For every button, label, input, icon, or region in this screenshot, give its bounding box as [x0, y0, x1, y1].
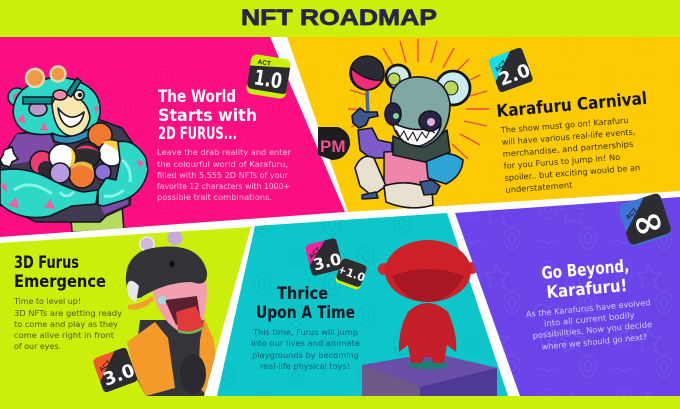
text: act 2 description: The show must go on! Karafuru: [499, 115, 629, 135]
character: 3D whale furu: [126, 231, 216, 396]
badge: act 2.0: ACT: [494, 59, 508, 74]
text: act 1 description: filled with 5,555 2D NFTs of your: [157, 170, 289, 180]
badge: act 3.0 + 1.0: +1.0: [335, 263, 367, 285]
heading: thrice upon a time: [256, 284, 355, 323]
badge: act 3.0 + 1.0: ACT: [308, 246, 322, 261]
text: act 2 description: will have various real-life events,: [501, 126, 636, 147]
heading: thrice upon a time: Thrice: [277, 284, 328, 304]
text: act 3 description: 3D NFTs are getting ready: [14, 308, 122, 318]
badge: act 3.0: [92, 347, 138, 393]
text: infinity description: As the Karafurus have evolved: [525, 297, 651, 319]
text: act 3+1 description: This time, Furus will jump: [252, 327, 358, 337]
text: act 2 description: [499, 114, 641, 195]
text: act 3+1 description: real-life physical toys!: [260, 361, 350, 371]
badge: act 2.0: 2.0: [496, 60, 533, 91]
heading: 3d furus emergence: [14, 253, 106, 292]
character: red toy on purple plinth: [362, 240, 497, 396]
badge: act 3.0: ACT: [98, 359, 113, 374]
text: infinity description: [525, 297, 654, 353]
heading: go beyond karafuru: Karafuru!: [546, 276, 628, 303]
panel: act 3.0 lime: [0, 227, 251, 396]
text: act 3 description: of our eyes.: [14, 341, 61, 351]
top title bar: [0, 0, 680, 37]
bottom bar: [0, 396, 680, 409]
text: act 2 description: merchandise, and partnerships: [502, 139, 634, 159]
speech bomb: PM: [320, 137, 346, 156]
panel: act 2.0 yellow: [287, 37, 680, 212]
badge: act 1.0: [246, 54, 291, 99]
badge: act 3.0: 3.0: [101, 360, 138, 391]
text: act 2 description: understatement: [505, 180, 573, 195]
speech bomb: [318, 127, 350, 160]
heading: 3d furus emergence: Emergence: [14, 272, 106, 292]
sun rays: [348, 39, 489, 159]
title: NFT ROADMAP: [241, 5, 437, 30]
badge: act 2.0: [487, 47, 534, 93]
heading: karafuru carnival: Karafuru Carnival: [496, 89, 648, 122]
character: robot bear: [350, 56, 470, 208]
text: act 1 description: favorite 12 characters with 1000+: [157, 181, 290, 191]
badge: act 1.0: ACT: [257, 59, 271, 68]
badge: act 1.0: 1.0: [252, 65, 284, 94]
badge: infinity: ACT: [625, 207, 639, 221]
text: act 3+1 description: into our lives and animate: [251, 338, 360, 348]
heading: go beyond karafuru: Go Beyond,: [541, 256, 630, 284]
heading: the world starts: The World: [158, 87, 236, 107]
text: act 3+1 description: playgrounds by becoming: [252, 350, 359, 360]
badge: act 3.0 + 1.0: 3.0: [311, 249, 343, 274]
panel: infinity purple: [455, 192, 680, 396]
heading: the world starts: 2D FURUS...: [158, 124, 237, 144]
text: act 2 description: for you Furus to jump in! No: [503, 152, 621, 171]
text: act 1 description: possible trait combinations.: [157, 192, 272, 202]
text: act 3 description: to come and play as they: [14, 319, 118, 329]
text: act 1 description: [157, 147, 292, 202]
heading: thrice upon a time: Upon A Time: [256, 303, 355, 323]
text: infinity description: where we should go next?: [541, 332, 648, 352]
text: act 1 description: Leave the drab reality and enter: [157, 147, 292, 157]
badge: act 3.0 + 1.0: [305, 238, 369, 291]
text: infinity description: into all current bodily: [543, 310, 635, 328]
text: act 3 description: [13, 296, 122, 351]
text: act 2 description: spoiler.. but exciting would be an: [504, 162, 641, 183]
panel: act 3.0+1.0 teal: [217, 213, 508, 396]
text: infinity description: possibilities, Now you decide: [532, 319, 652, 341]
badge: infinity: ∞: [626, 196, 670, 248]
text: act 3 description: Time to level up!: [13, 296, 81, 306]
heading: the world starts: [158, 87, 257, 144]
character: teal bear: [0, 66, 148, 232]
text: act 3 description: come alive right in front: [14, 330, 115, 340]
badge: infinity: [617, 192, 674, 251]
heading: go beyond karafuru: [541, 256, 630, 303]
text: act 1 description: the colourful world of Karafuru,: [157, 159, 288, 169]
panel: act 1.0 pink: [0, 37, 345, 237]
text: act 3+1 description: [251, 327, 360, 371]
heading: 3d furus emergence: 3D Furus: [14, 253, 79, 273]
heading: the world starts: Starts with: [158, 106, 257, 126]
